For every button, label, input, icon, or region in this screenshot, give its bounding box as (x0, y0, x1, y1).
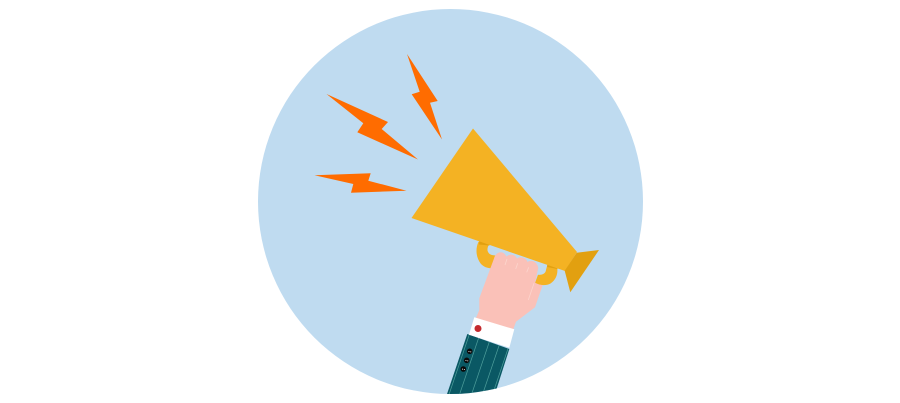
infographic: megaphone illustration (258, 9, 643, 394)
cuff button (474, 325, 482, 332)
shirt cuff (469, 317, 514, 348)
icon: megaphone body (412, 128, 577, 271)
icon: jacket sleeve (447, 334, 510, 394)
icon: middle lightning bolt (326, 94, 418, 160)
handle: right grip (535, 265, 557, 285)
icon: hand holding handle (476, 241, 558, 330)
hand (476, 252, 543, 330)
icon: megaphone bell rim (565, 250, 599, 292)
background circle (258, 9, 643, 394)
handle: shadow joints (479, 241, 490, 246)
icon: lower lightning bolt (314, 173, 406, 193)
handle: left grip (476, 242, 496, 268)
sleeve buttons (460, 348, 473, 372)
icon: top lightning bolt (407, 54, 442, 140)
finger creases (505, 259, 534, 300)
